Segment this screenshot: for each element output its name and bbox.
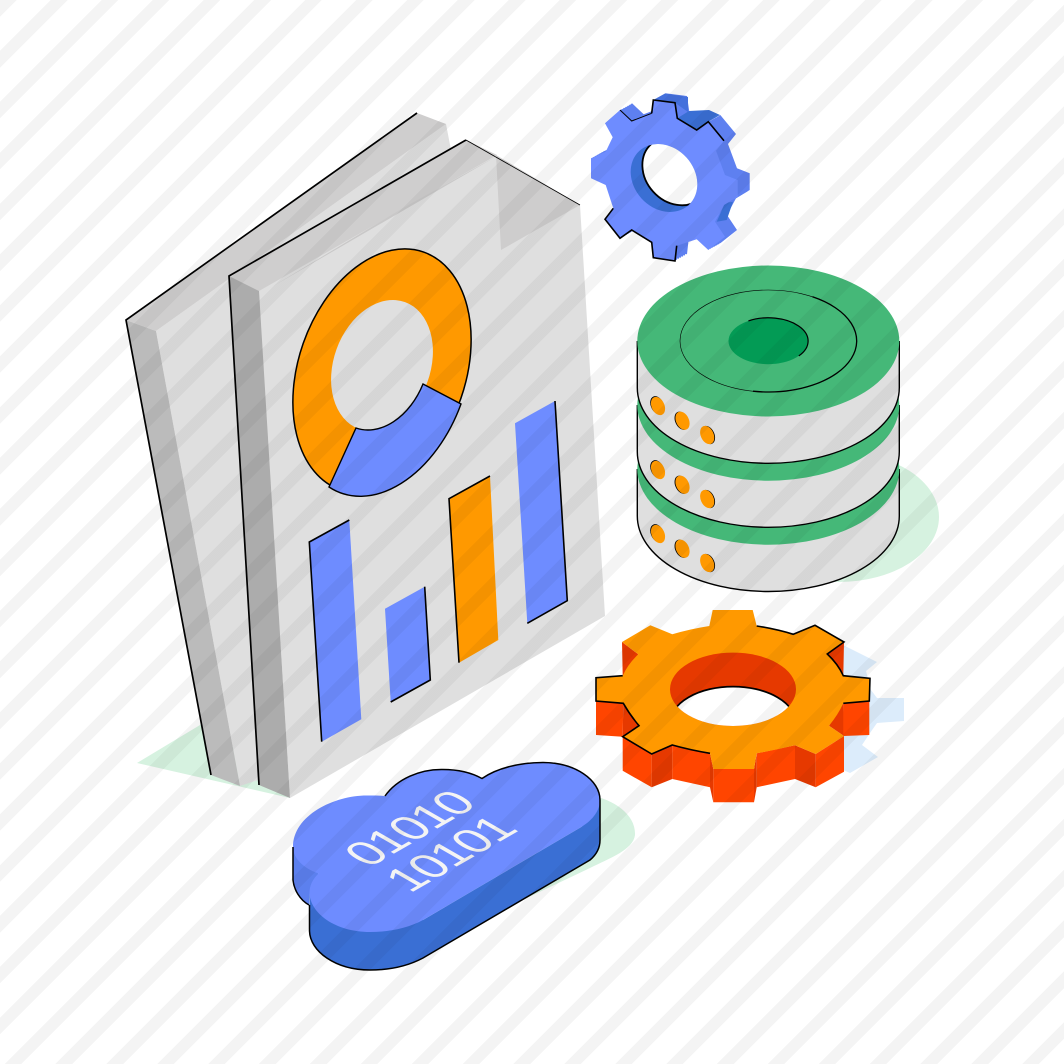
database layer 2 xyxy=(637,330,899,527)
donut blue segment xyxy=(329,384,461,496)
ground shadow: documents xyxy=(137,722,290,798)
gear top face xyxy=(596,610,870,769)
front document xyxy=(229,140,605,798)
cloud side wall xyxy=(310,800,600,970)
database top core xyxy=(728,318,808,364)
bar 3 xyxy=(449,476,498,663)
icon: small blue gear xyxy=(591,93,750,261)
gear hole xyxy=(670,652,796,726)
icon: large orange gear xyxy=(596,610,870,802)
ground shadow: cloud xyxy=(440,795,635,925)
database layer 1 xyxy=(637,266,899,463)
ground shadow: database xyxy=(739,452,939,582)
indicator lights row 3 xyxy=(647,522,718,574)
donut chart xyxy=(262,224,502,518)
gear outline xyxy=(596,625,870,754)
indicator lights row 1 xyxy=(647,394,718,446)
database top ring xyxy=(680,290,857,392)
bar 1 xyxy=(309,520,361,742)
document dog-ear corner xyxy=(496,155,580,250)
icon: data cloud xyxy=(293,762,600,970)
gear side walls xyxy=(596,642,869,802)
cloud binary text line 2: 10101 xyxy=(374,810,528,899)
indicator lights row 2 xyxy=(647,458,718,510)
cloud binary text line 1: 01010 xyxy=(333,784,487,874)
cloud outline xyxy=(293,762,600,970)
ground shadow: orange gear xyxy=(820,640,904,773)
database cylinder xyxy=(637,266,899,592)
bar chart xyxy=(309,401,567,742)
cloud left lobe side xyxy=(293,847,318,905)
bar 4 xyxy=(515,401,567,623)
database layer 3 xyxy=(637,394,899,592)
back document xyxy=(126,113,451,786)
cloud top face xyxy=(293,762,600,932)
document fold shading xyxy=(270,156,497,288)
bar 2 xyxy=(385,587,430,702)
